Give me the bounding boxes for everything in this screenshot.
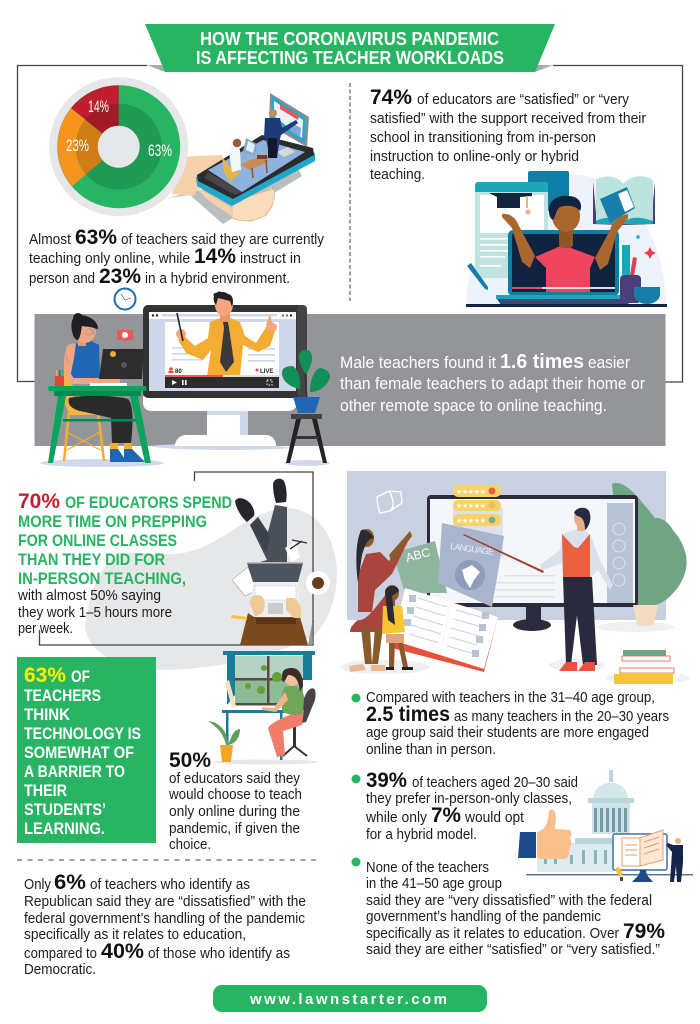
text block: male vs female teachers adaptation: than female teachers to adapt their home or: [340, 375, 645, 393]
text block: teaching mode: instruct in: [240, 250, 301, 267]
text block: political identification: federal government’s handling of the pandemic: [24, 910, 305, 927]
text block: preference for in-person classes: for a hybrid model.: [366, 826, 477, 843]
text block: 50% of educators: of educators said they: [169, 770, 300, 787]
divider between top columns: [349, 83, 351, 301]
icon: classroom with teacher, books and family: ★★★★★: [456, 488, 486, 496]
icon: woman working at desk by window: [208, 651, 319, 764]
icon: student with laptop, cap and book: [466, 171, 667, 307]
panel: 63% technology barrier: LEARNING.: [24, 819, 105, 838]
icon: classroom with teacher, books and family: ★★★★★: [456, 502, 486, 510]
panel: 63% technology barrier: STUDENTS’: [24, 800, 106, 819]
text block: teaching mode: person and: [29, 270, 95, 287]
second panel frame: [40, 472, 313, 645]
text block: teaching mode: 23%: [99, 265, 141, 288]
donut chart: 63% online, 23% hybrid, 14% in person: 14%: [88, 97, 109, 116]
text block: political identification: specifically as it relates to education,: [24, 926, 246, 943]
text block: male vs female teachers adaptation: other remote space to online teaching.: [340, 397, 607, 415]
text block: male vs female teachers adaptation: [340, 351, 645, 415]
text block: satisfaction with school support: [370, 86, 646, 183]
text block: satisfaction with school support: 74%: [370, 86, 412, 109]
text block: teaching mode: Almost: [29, 231, 72, 248]
text block: 50% of educators: would choose to teach: [168, 786, 302, 803]
icon: classroom with teacher, books and family: ABC: [404, 545, 432, 565]
text block: male vs female teachers adaptation: Male teachers found it: [340, 354, 496, 372]
text block: teaching mode: [29, 226, 324, 288]
text block: satisfaction with school support: of educators are “satisfied” or “very: [417, 91, 629, 108]
text block: political identification: Republican said they are “dissatisfied” with the: [24, 893, 306, 910]
text block: 50% of educators: choice.: [169, 836, 211, 853]
icon: online teacher on desktop monitor: 80: [175, 369, 182, 375]
text block: teaching mode: 14%: [194, 245, 236, 268]
panel: 63% technology barrier: TECHNOLOGY IS: [24, 724, 141, 743]
background blob behind laptop person: [85, 508, 337, 670]
text block: 70% of educators: THAN THEY DID FOR: [18, 550, 165, 569]
text block: federal government satisfaction: government’s handling of the pandemic: [366, 908, 601, 925]
text block: 70% of educators: 70%: [18, 490, 60, 513]
text block: federal government satisfaction: said they are either “satisfied” or “very satisfied.”: [366, 941, 660, 958]
text block: preference for in-person classes: of teachers aged 20–30 said: [412, 774, 578, 791]
text block: political identification: Democratic.: [24, 961, 96, 978]
text block: male vs female teachers adaptation: 1.6 times: [500, 351, 584, 373]
text block: teaching mode: 63%: [75, 226, 117, 249]
text block: political identification: 6%: [54, 871, 86, 894]
title banner: [145, 24, 555, 72]
text block: political identification: Only: [24, 876, 51, 893]
panel: 63% technology barrier: OF: [71, 667, 90, 686]
text block: 70% of educators: per week.: [18, 620, 73, 637]
donut chart: 63% online, 23% hybrid, 14% in person: 63%: [148, 141, 172, 160]
text block: teaching mode: in a hybrid environment.: [145, 270, 290, 287]
text block: satisfaction with school support: teaching.: [370, 166, 425, 183]
title banner: IS AFFECTING TEACHER WORKLOADS: [196, 47, 504, 68]
panel: 63% technology barrier: A BARRIER TO: [24, 762, 125, 781]
icon: capitol with thumbs up and monitor: [518, 770, 693, 882]
text block: satisfaction with school support: instruction to online-only or hybrid: [370, 148, 579, 165]
text block: engagement comparison: Compared with teachers in the 31–40 age group,: [366, 689, 655, 706]
text block: 70% of educators: FOR ONLINE CLASSES: [18, 531, 177, 550]
text block: engagement comparison: as many teachers in the 20–30 years: [454, 708, 669, 725]
text block: 70% of educators: MORE TIME ON PREPPING: [18, 512, 207, 531]
top panel frame: [18, 65, 682, 382]
footer website pill: [213, 985, 487, 1012]
text block: federal government satisfaction: None of the teachers: [366, 859, 489, 876]
text block: 50% of educators: only online during the: [169, 803, 300, 820]
text block: satisfaction with school support: satisfied” with the support received from their: [370, 110, 646, 127]
text block: engagement comparison: [352, 689, 669, 758]
text block: preference for in-person classes: [352, 769, 578, 843]
footer website pill: www.lawnstarter.com: [249, 991, 447, 1008]
text block: federal government satisfaction: [352, 858, 665, 958]
text block: 50% of educators: pandemic, if given the: [169, 820, 300, 837]
text block: federal government satisfaction: in the 41–50 age group: [366, 875, 502, 892]
panel: 63% technology barrier: THEIR: [24, 781, 67, 800]
donut chart: 63% online, 23% hybrid, 14% in person: 23%: [66, 136, 89, 155]
text block: political identification: [24, 871, 306, 978]
icon: classroom with teacher, books and family: ★★★★★: [456, 517, 486, 525]
text block: 50% of educators: 50%: [169, 749, 211, 772]
text block: federal government satisfaction: 79%: [623, 920, 665, 943]
title banner: HOW THE CORONAVIRUS PANDEMIC: [200, 28, 499, 49]
text block: 70% of educators: they work 1–5 hours more: [18, 604, 172, 621]
text block: federal government satisfaction: specifically as it relates to education. Over: [366, 925, 619, 942]
panel: 63% technology barrier: 63%: [24, 664, 66, 687]
icon: classroom with teacher, books and family: LANGUAGE: [450, 541, 495, 557]
text block: political identification: of teachers who identify as: [90, 876, 250, 893]
icon: clock: [114, 288, 136, 310]
text block: 70% of educators: [17, 490, 232, 637]
text block: 70% of educators: with almost 50% saying: [17, 587, 161, 604]
text block: 70% of educators: OF EDUCATORS SPEND: [65, 493, 232, 512]
icon: woman at desk with laptop: [40, 313, 164, 467]
icon: online teacher on desktop monitor: LIVE: [260, 369, 273, 375]
donut chart: 63% online, 23% hybrid, 14% in person: [49, 77, 188, 216]
text block: preference for in-person classes: would opt: [464, 809, 525, 826]
text block: political identification: 40%: [101, 940, 144, 963]
icon: person with laptop, top-down view: [231, 479, 330, 645]
text block: satisfaction with school support: school in transitioning from in-person: [370, 129, 596, 146]
panel: 63% technology barrier: SOMEWHAT OF: [24, 743, 134, 762]
text block: political identification: of those who identify as: [148, 945, 290, 962]
text block: preference for in-person classes: while only: [365, 809, 427, 826]
icon: online teacher on desktop monitor: [143, 291, 307, 450]
text block: federal government satisfaction: said they are “very dissatisfied” with the federal: [366, 892, 652, 909]
text block: preference for in-person classes: 39%: [366, 769, 407, 792]
text block: engagement comparison: 2.5 times: [366, 703, 450, 726]
text block: 70% of educators: IN-PERSON TEACHING,: [18, 569, 186, 588]
text block: engagement comparison: online than in person.: [366, 741, 496, 758]
text block: political identification: compared to: [24, 945, 97, 962]
text block: 50% of educators: [168, 749, 302, 853]
icon: hand holding phone with teacher: [168, 93, 315, 224]
panel: 63% technology barrier: THINK: [24, 705, 71, 724]
panel: grey band: [34, 314, 666, 446]
panel: 63% technology barrier: TEACHERS: [24, 686, 101, 705]
text block: teaching mode: teaching only online, while: [29, 250, 190, 267]
panel: 63% technology barrier: [17, 657, 156, 843]
text block: teaching mode: of teachers said they are currently: [121, 231, 324, 248]
icon: potted plant on stool: [282, 350, 330, 466]
text block: engagement comparison: age group said their students are more engaged: [366, 724, 649, 741]
icon: classroom with teacher, books and family: [340, 471, 690, 684]
text block: preference for in-person classes: 7%: [431, 804, 461, 827]
text block: preference for in-person classes: they prefer in-person-only classes,: [366, 790, 572, 807]
text block: male vs female teachers adaptation: easier: [588, 354, 630, 372]
